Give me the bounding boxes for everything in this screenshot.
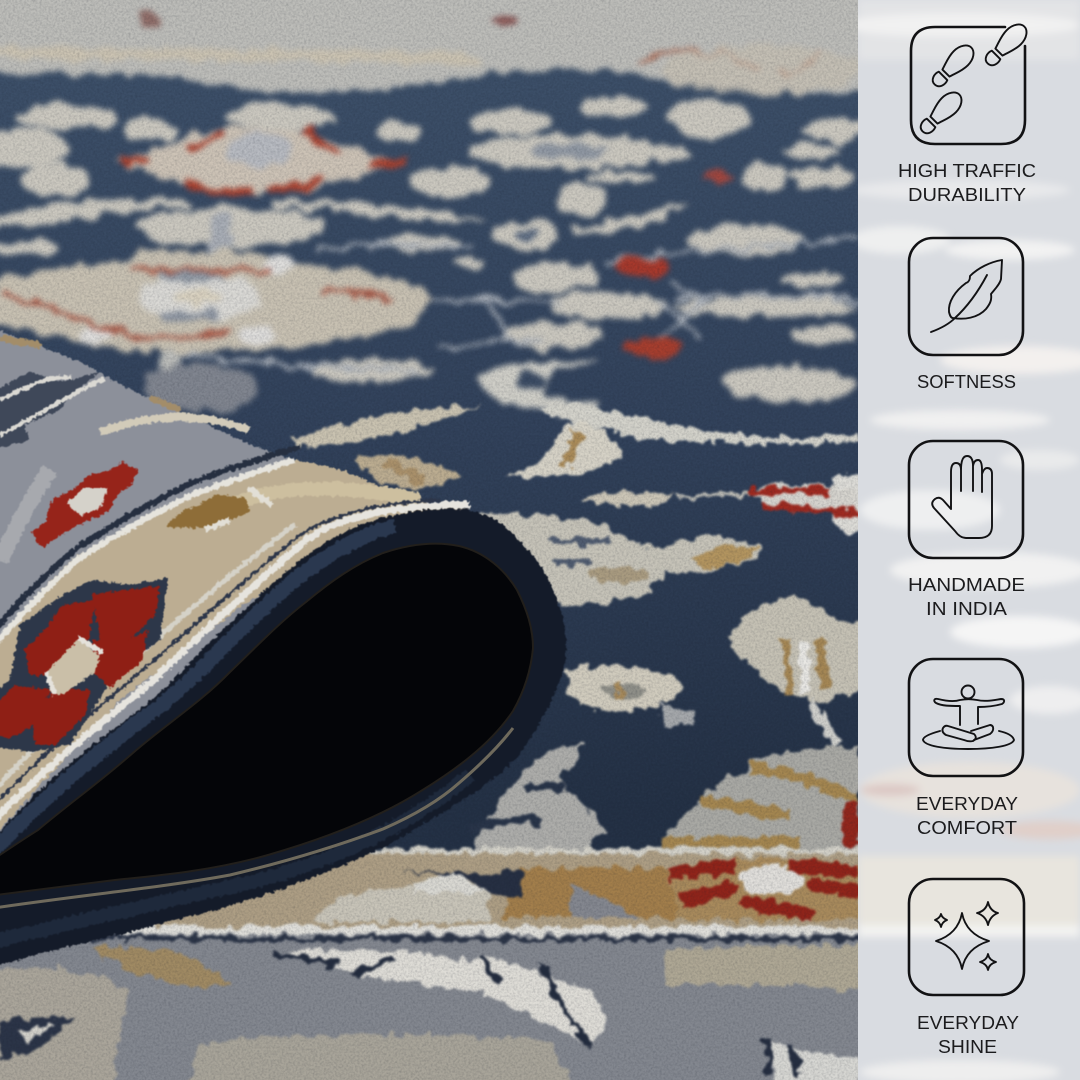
white seam line (0, 460, 295, 660)
label: handmade in india (908, 575, 1025, 619)
label: everyday shine: EVERYDAY (917, 1013, 1019, 1033)
icon: sparkles (909, 879, 1024, 995)
black underside (0, 544, 533, 897)
tan inner edge line (0, 728, 513, 910)
icon: open hand (909, 441, 1023, 558)
out-of-focus upper field (0, 0, 1080, 420)
red flower upper (31, 462, 138, 548)
feature: softness (909, 238, 1023, 392)
top border band (0, 0, 1080, 95)
large floral medallion left (0, 215, 433, 372)
label: everyday comfort (916, 794, 1018, 838)
navy binding (0, 509, 566, 970)
bottom grey field (0, 934, 1080, 1080)
label: everyday comfort: COMFORT (917, 818, 1017, 838)
white edge lines (0, 505, 470, 835)
feature: everyday comfort (909, 659, 1023, 838)
rolled rug corner (0, 325, 566, 970)
label: everyday comfort: EVERYDAY (916, 794, 1018, 814)
icon: meditating figure (909, 659, 1023, 776)
faded rug showing through panel (840, 0, 1080, 1080)
label: handmade in india: IN INDIA (926, 599, 1007, 619)
side panel: feature list (840, 0, 1080, 1080)
red flower (112, 128, 731, 358)
feature: handmade in india (908, 441, 1025, 619)
feature: everyday shine (909, 879, 1024, 1057)
label: high traffic durability: DURABILITY (908, 185, 1026, 205)
icon: feather (909, 238, 1023, 355)
upper row motifs (0, 97, 866, 402)
label: high traffic durability (898, 161, 1036, 205)
tan motif (165, 494, 250, 528)
label: softness: SOFTNESS (917, 372, 1016, 392)
grey motif under roll (142, 363, 258, 413)
mid scrolls and flowers (290, 403, 905, 745)
grey fold surface (0, 325, 470, 880)
label: handmade in india: HANDMADE (908, 575, 1025, 595)
in-focus lower field (0, 403, 1080, 1080)
label: everyday shine (917, 1013, 1019, 1057)
upper scroll (477, 360, 598, 420)
label: everyday shine: SHINE (938, 1037, 997, 1057)
beige border band (0, 459, 470, 850)
red flower lower (0, 578, 168, 752)
label: high traffic durability: HIGH TRAFFIC (898, 161, 1036, 181)
bottom border band (0, 848, 1080, 934)
feature: high traffic durability (898, 20, 1036, 205)
dark seam (0, 447, 300, 645)
icon: footprints (911, 20, 1031, 144)
lower right floral band (470, 745, 860, 850)
